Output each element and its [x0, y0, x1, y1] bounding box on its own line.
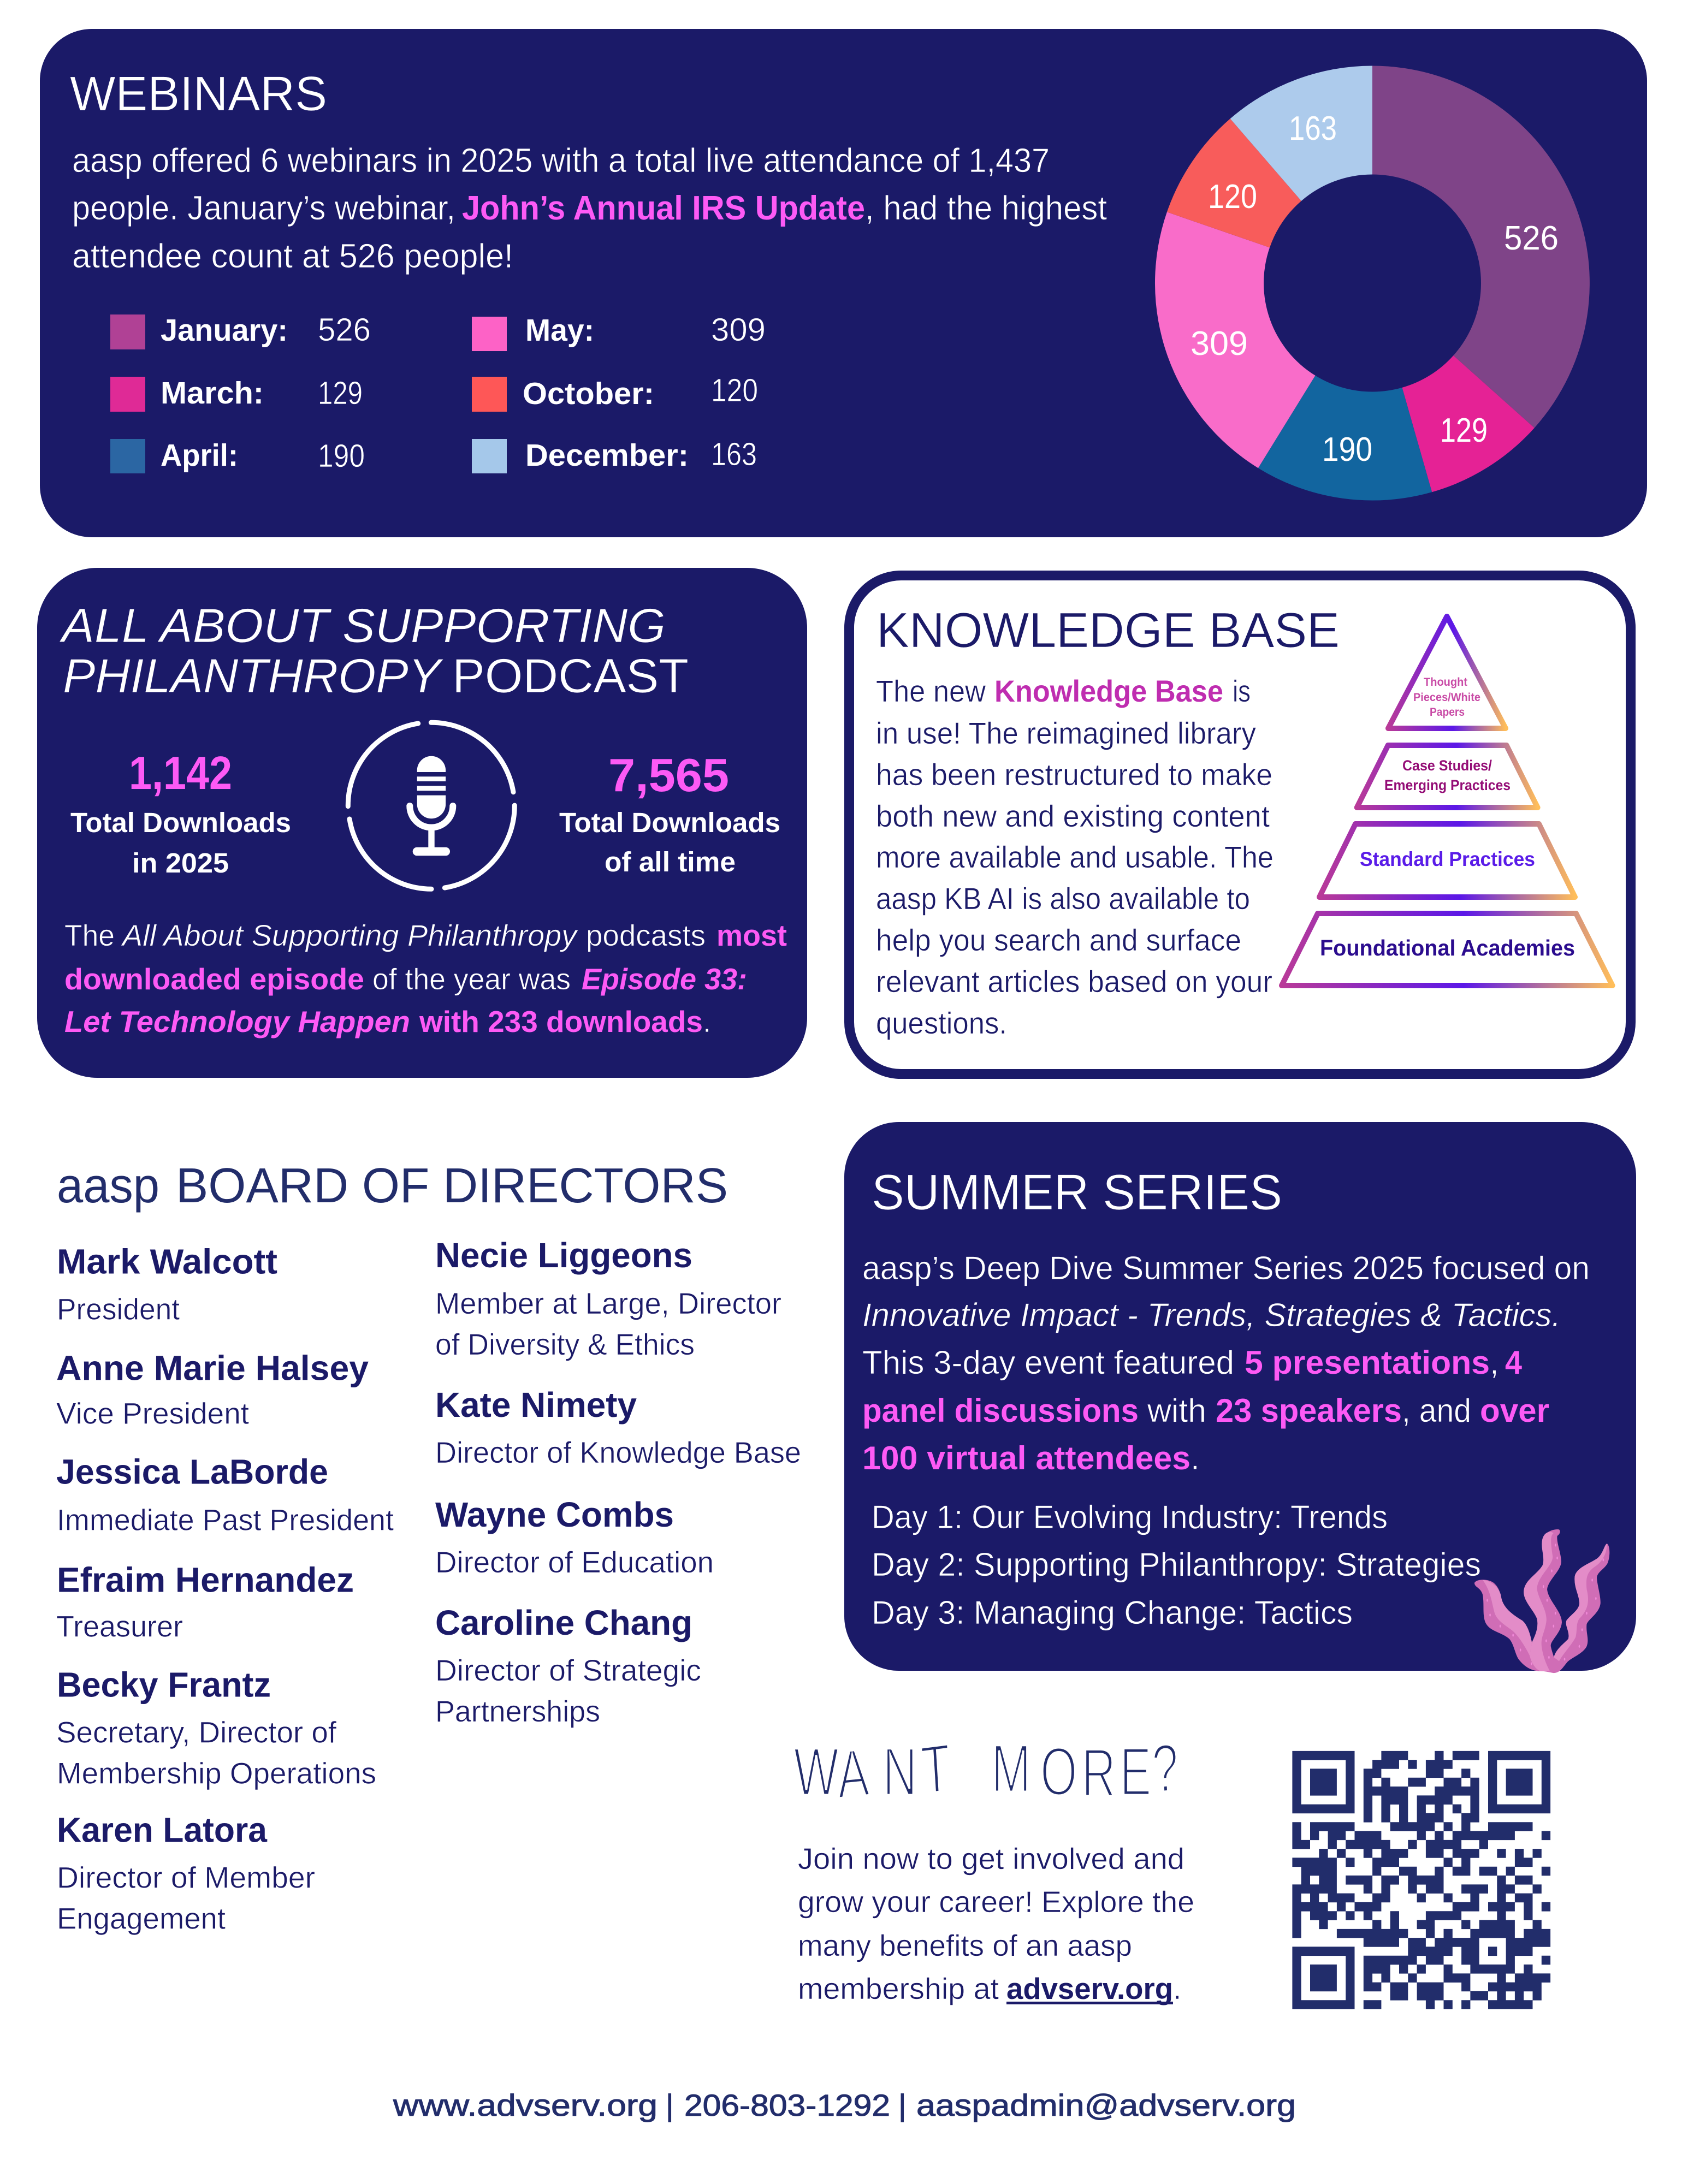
text block: summer series description: 100 virtual attendees [862, 1440, 1191, 1476]
board list: right column: Member at Large, Director [435, 1286, 781, 1320]
text block: podcast description: downloaded episode [64, 962, 364, 996]
legend item: October: October: [523, 376, 654, 411]
board list: right column: Caroline Chang [435, 1603, 692, 1642]
text block: summer series description: Innovative Impact - Trends, Strategies & Tactics. [862, 1297, 1561, 1333]
board list: left column: Secretary, Director of [56, 1716, 337, 1749]
text block: join invitation: Join now to get involved and [798, 1842, 1184, 1876]
panel: knowledge base [849, 575, 1631, 1074]
chart: knowledge pyramid [1282, 616, 1613, 986]
donut chart: webinar attendance: 129 [1440, 412, 1488, 449]
board list: left column: President [57, 1292, 180, 1326]
legend item: April [110, 438, 365, 474]
pyramid tier: thought pieces: Pieces/White [1413, 691, 1480, 704]
pyramid tier: thought pieces: Thought [1424, 676, 1467, 689]
text block: summer series description: with [1147, 1392, 1206, 1429]
legend item: October: 120 [711, 372, 758, 408]
text block: summer series description: panel discussions [862, 1392, 1139, 1429]
text block: podcast description: podcasts [586, 918, 706, 952]
legend item: December: December: [525, 438, 689, 473]
stat: downloads of all time: of all time [605, 846, 736, 877]
legend item: May: 309 [711, 312, 766, 348]
panel: webinars [40, 29, 1647, 537]
legend item: May: May: [525, 313, 594, 348]
text block: knowledge base description: relevant articles based on your [876, 964, 1272, 999]
stat: downloads of all time: 7,565 [608, 750, 729, 802]
legend: monthly attendance [110, 312, 766, 474]
legend item: April: April: [161, 438, 238, 473]
heading: want more: WANT MORE? [793, 1729, 1181, 1813]
heading: podcast: PHILANTHROPY [63, 649, 443, 703]
board list: left column: Karen Latora [57, 1811, 267, 1850]
heading: podcast [59, 598, 689, 703]
legend item: December: 163 [711, 436, 757, 472]
legend item: March: 129 [318, 375, 363, 411]
legend item: January: January: [161, 313, 288, 348]
text block: webinars summary: attendee count at 526 people! [72, 238, 513, 275]
text block: webinars summary: people. January’s webinar, [72, 189, 455, 227]
text block: knowledge base description: help you search and surface [876, 923, 1241, 957]
icon: QR code [1292, 1755, 1550, 2005]
text block: join invitation: grow your career! Explore the [798, 1885, 1194, 1919]
icon: microphone [348, 722, 514, 889]
footer: contact details: 206-803-1292 [684, 2088, 890, 2122]
text block: day schedule [872, 1499, 1481, 1631]
pyramid tier: standard practices [1319, 824, 1575, 897]
legend item: March [110, 375, 363, 412]
pyramid tier: foundational academies: Foundational Academies [1320, 935, 1575, 960]
text block: summer series description: , and [1402, 1392, 1471, 1429]
text block: podcast description: Episode 33: [582, 962, 747, 996]
text block: podcast description: with 233 downloads [419, 1005, 703, 1038]
donut chart: webinar attendance: 120 [1208, 178, 1257, 216]
stat: downloads in 2025: 1,142 [129, 747, 232, 799]
heading: webinars: WEBINARS [70, 66, 327, 121]
text block: knowledge base description: is [1233, 674, 1251, 708]
text block: summer series description: 4 [1505, 1344, 1523, 1381]
text block: webinars summary [72, 142, 1107, 275]
pyramid tier: case studies: Emerging Practices [1384, 777, 1511, 793]
board list: left column: Jessica LaBorde [56, 1452, 328, 1492]
heading: knowledge base: KNOWLEDGE BASE [876, 603, 1340, 658]
board list: left column: Becky Frantz [57, 1665, 271, 1705]
panel: board of directors [56, 1159, 801, 1935]
pyramid tier: foundational academies [1282, 913, 1613, 986]
footer: contact details: | [898, 2088, 907, 2122]
stat: downloads in 2025: in 2025 [132, 847, 229, 879]
text block: webinars summary: , had the highest [865, 189, 1107, 227]
board list: right column: Necie Liggeons [435, 1236, 692, 1275]
board list: left column: Director of Member [57, 1861, 315, 1895]
footer: contact details [393, 2088, 1296, 2122]
text block: summer series description [862, 1250, 1590, 1476]
legend item: October [472, 372, 758, 412]
pyramid tier: case studies: Case Studies/ [1402, 757, 1492, 774]
legend item: March: March: [161, 376, 264, 411]
text block: podcast description: Let Technology Happen [64, 1005, 410, 1038]
donut chart: webinar attendance: 163 [1289, 110, 1337, 147]
board list: right column: Partnerships [435, 1694, 600, 1728]
text block: knowledge base description: has been restructured to make [876, 757, 1272, 792]
legend item: May [472, 312, 766, 351]
board list: left column: Immediate Past President [57, 1503, 394, 1536]
text block: join invitation: many benefits of an aasp [798, 1928, 1132, 1962]
heading: board of directors: aasp [57, 1159, 159, 1213]
legend item: January: 526 [318, 312, 371, 348]
footer: contact details: | [666, 2088, 674, 2122]
stat: downloads of all time [559, 750, 780, 877]
donut chart: webinar attendance: 190 [1322, 431, 1372, 468]
text block: day schedule: Day 2: Supporting Philanthropy: Strategies [872, 1546, 1481, 1583]
board list: right column: Director of Knowledge Base [435, 1435, 801, 1469]
text block: knowledge base description: Knowledge Base [994, 674, 1223, 708]
board list: right column: Director of Strategic [435, 1653, 701, 1687]
text block: summer series description: , [1490, 1344, 1499, 1381]
text block: join invitation: . [1173, 1972, 1181, 2005]
text block: knowledge base description: The new [876, 674, 986, 708]
icon: seaweed [1474, 1529, 1609, 1673]
legend item: December [472, 436, 757, 473]
stat: downloads in 2025: Total Downloads [70, 807, 291, 838]
text block: summer series description: This 3-day event featured [862, 1344, 1234, 1381]
text block: knowledge base description: more available and usable. The [876, 840, 1274, 874]
text block: summer series description: aasp’s Deep Dive Summer Series 2025 focused on [862, 1250, 1590, 1286]
text block: summer series description: 23 speakers [1216, 1392, 1402, 1429]
board list: left column [56, 1242, 394, 1935]
callout: want more [793, 1729, 1194, 2005]
panel: summer series [844, 1122, 1636, 1673]
heading: board of directors: BOARD OF DIRECTORS [176, 1159, 728, 1213]
board list: right column: of Diversity & Ethics [435, 1327, 695, 1361]
pyramid tier: thought pieces [1388, 616, 1506, 728]
text block: day schedule: Day 3: Managing Change: Tactics [872, 1594, 1353, 1631]
board list: right column: Kate Nimety [435, 1385, 637, 1425]
text block: podcast description: . [703, 1005, 711, 1038]
stat: downloads in 2025 [70, 747, 291, 879]
text block: knowledge base description: in use! The reimagined library [876, 716, 1256, 750]
footer: contact details: www.advserv.org [393, 2088, 658, 2122]
text block: podcast description: The [64, 918, 115, 952]
heading: summer series: SUMMER SERIES [872, 1165, 1282, 1220]
stat: downloads of all time: Total Downloads [559, 807, 780, 838]
donut chart: webinar attendance: 526 [1504, 219, 1559, 257]
text block: podcast description: All About Supporting Philanthropy [121, 918, 579, 952]
text block: summer series description: 5 presentations [1245, 1344, 1490, 1381]
text block: join invitation: advserv.org [1006, 1972, 1173, 2005]
text block: day schedule: Day 1: Our Evolving Industry: Trends [872, 1499, 1388, 1535]
heading: podcast: PODCAST [452, 649, 689, 703]
board list: left column: Efraim Hernandez [57, 1560, 354, 1600]
panel: podcast [37, 568, 807, 1078]
pyramid tier: case studies [1357, 745, 1538, 808]
board list: left column: Mark Walcott [57, 1242, 277, 1281]
board list: right column [435, 1236, 801, 1728]
legend item: January [110, 312, 371, 349]
text block: summer series description: over [1480, 1392, 1549, 1429]
board list: left column: Vice President [56, 1397, 249, 1431]
text block: podcast description: most [716, 918, 787, 952]
text block: webinars summary: aasp offered 6 webinars in 2025 with a total live attendance of 1,437 [72, 142, 1050, 180]
legend item: April: 190 [318, 438, 365, 474]
donut chart: webinar attendance [1155, 66, 1590, 501]
text block: podcast description: of the year was [372, 962, 571, 996]
board list: left column: Membership Operations [57, 1756, 376, 1790]
board list: left column: Treasurer [56, 1610, 183, 1643]
text block: join invitation: membership at [798, 1972, 999, 2005]
board list: left column: Anne Marie Halsey [56, 1349, 369, 1388]
text block: webinars summary: John’s Annual IRS Update [462, 189, 865, 227]
board list: left column: Engagement [57, 1901, 226, 1935]
board list: right column: Wayne Combs [435, 1495, 674, 1534]
text block: knowledge base description: both new and existing content [876, 799, 1270, 833]
board list: right column: Director of Education [435, 1545, 714, 1579]
text block: summer series description: . [1191, 1440, 1200, 1476]
footer: contact details: aaspadmin@advserv.org [916, 2088, 1296, 2122]
heading: podcast: ALL ABOUT SUPPORTING [59, 598, 666, 652]
pyramid tier: standard practices: Standard Practices [1360, 848, 1535, 870]
pyramid tier: thought pieces: Papers [1430, 706, 1465, 719]
donut chart: webinar attendance: 309 [1191, 325, 1248, 363]
text block: knowledge base description: questions. [876, 1006, 1007, 1040]
text block: knowledge base description: aasp KB AI is also available to [876, 881, 1250, 916]
text block: podcast description [64, 918, 787, 1038]
text block: knowledge base description [876, 674, 1274, 1040]
text block: join invitation [798, 1842, 1194, 2005]
